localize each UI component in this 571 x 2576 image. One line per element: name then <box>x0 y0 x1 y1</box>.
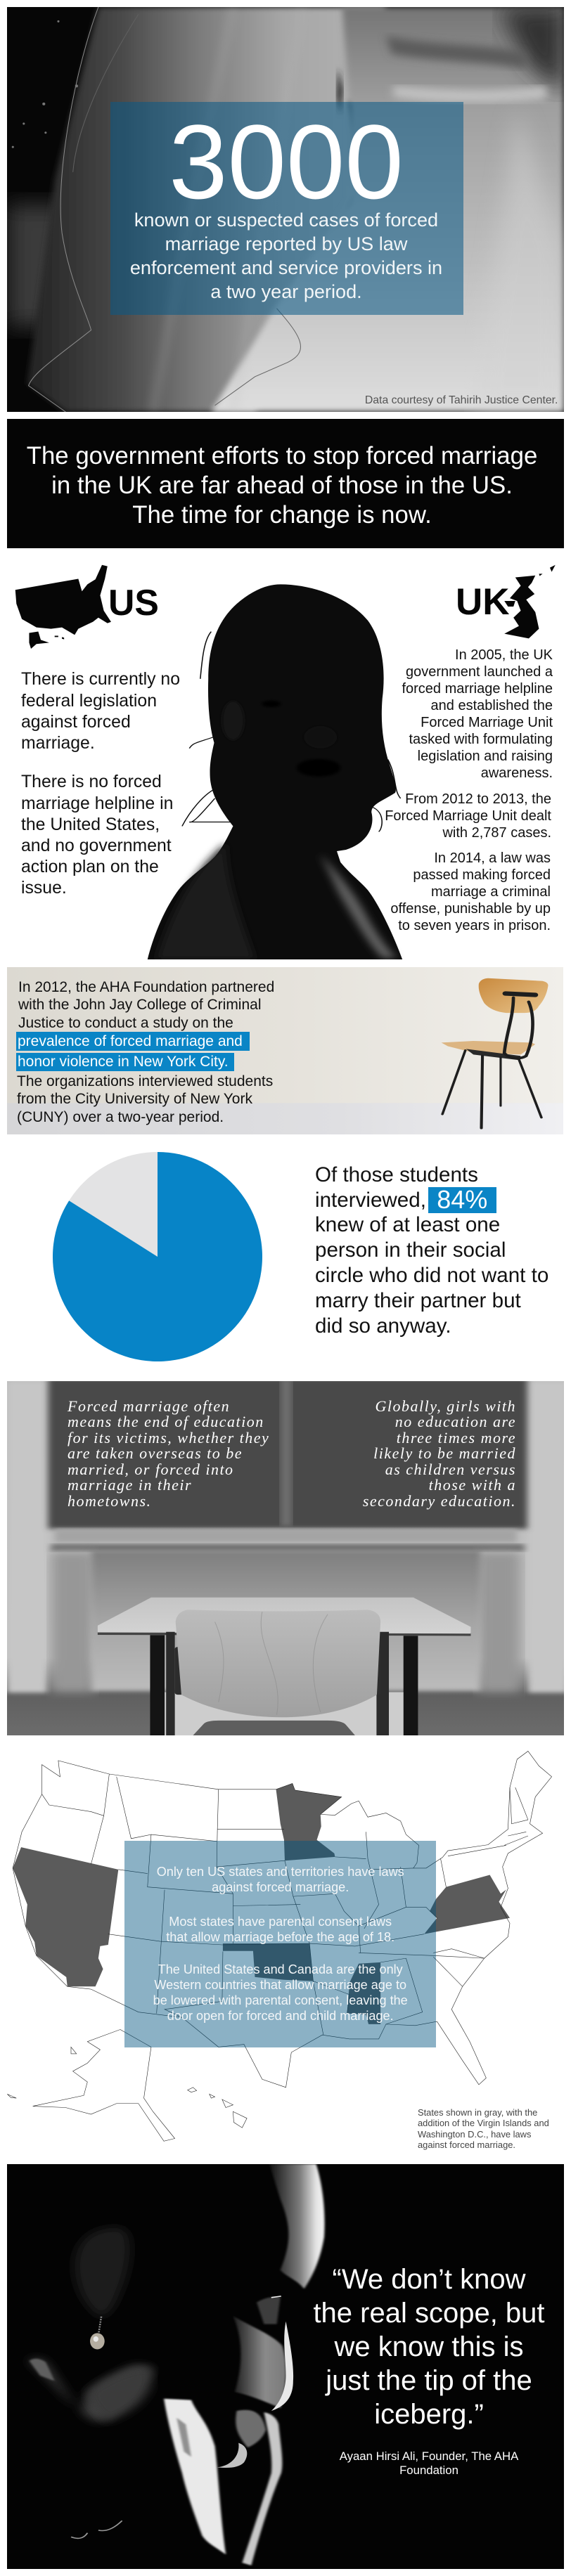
UK helpline note <box>402 647 553 781</box>
banner statement: The time for change is now. <box>132 501 432 529</box>
UK case count note: Forced Marriage Unit dealt <box>385 808 551 824</box>
UK helpline note: awareness. <box>481 765 553 781</box>
text: survey result: interviewed, <box>315 1189 426 1212</box>
text: study introduction <box>18 979 274 1031</box>
photo: bride veil and dress <box>7 7 564 412</box>
map legend note: Washington D.C., have laws <box>418 2129 531 2140</box>
highlight: study topic line one: prevalence of forced marriage and <box>18 1033 243 1049</box>
quote text: “We don’t know <box>333 2264 525 2295</box>
text: education impact: hometowns. <box>68 1492 152 1510</box>
text: study method <box>17 1073 273 1125</box>
text: study method: from the City University of New York <box>17 1091 252 1107</box>
text: survey result: did so anyway. <box>315 1314 451 1338</box>
text: global education statistic: no education are <box>395 1413 516 1430</box>
highlight: 84%: 84% <box>437 1185 487 1214</box>
text: education impact: marriage in their <box>68 1476 192 1494</box>
text: education impact: are taken overseas to be <box>68 1444 243 1462</box>
UK law note: marriage a criminal <box>431 884 551 900</box>
banner statement: The government efforts to stop forced marriage <box>27 442 537 470</box>
US legislation note: federal legislation <box>21 692 157 710</box>
quote attribution <box>339 2449 519 2477</box>
quote text: the real scope, but <box>313 2298 545 2329</box>
statistic description: a two year period. <box>210 280 362 302</box>
text: education impact <box>68 1397 269 1510</box>
text: education impact: for its victims, whether they <box>68 1429 269 1446</box>
statistic description: known or suspected cases of forced <box>134 209 438 231</box>
text: states with laws <box>157 1865 404 1894</box>
UK law note: passed making forced <box>413 867 551 883</box>
quote text: iceberg.” <box>374 2399 484 2430</box>
text: US facts <box>21 670 180 898</box>
text: study introduction: Justice to conduct a study on the <box>18 1015 233 1031</box>
text: survey result: person in their social <box>315 1238 506 1262</box>
US legislation note: There is currently no <box>21 670 180 689</box>
text: education impact: means the end of education <box>68 1413 264 1430</box>
US legislation note: against forced <box>21 713 131 732</box>
statistic description: marriage reported by US law <box>165 233 407 254</box>
text: study method: The organizations interviewed students <box>17 1073 273 1089</box>
text: survey result: circle who did not want to <box>315 1264 548 1287</box>
text: parental consent <box>166 1915 394 1944</box>
photo: silhouette of young woman <box>148 584 402 959</box>
UK helpline note: legislation and raising <box>418 749 553 764</box>
panel: US versus UK comparison <box>7 555 564 959</box>
panel: classroom photo <box>7 1381 564 1735</box>
panel: 84 percent statistic <box>53 1152 548 1361</box>
map: US states with forced marriage laws <box>7 1751 552 2142</box>
US helpline note: the United States, <box>21 815 160 834</box>
blue overlay box with statistic <box>110 102 463 315</box>
big number: 3000: 3000 <box>169 103 404 221</box>
UK law note <box>390 850 551 933</box>
text: states with laws: against forced marriage. <box>212 1880 349 1894</box>
UK helpline note: government launched a <box>406 664 553 680</box>
quote text: just the tip of the <box>326 2365 532 2396</box>
quote attribution: Ayaan Hirsi Ali, Founder, The AHA <box>340 2449 518 2463</box>
text: western countries <box>153 1962 408 2023</box>
UK case count note: with 2,787 cases. <box>442 825 551 841</box>
text: study introduction: In 2012, the AHA Foundation partnered <box>18 979 274 995</box>
map legend note: addition of the Virgin Islands and <box>418 2118 549 2128</box>
US legislation note <box>21 670 180 753</box>
text: states with laws: Only ten US states and territories have laws <box>157 1865 404 1879</box>
UK law note: to seven years in prison. <box>398 918 551 933</box>
photo: woman in profile <box>27 2164 326 2567</box>
text: survey result: marry their partner but <box>315 1289 521 1312</box>
text: global education statistic: Globally, girls with <box>375 1397 516 1415</box>
panel: hero bridal photo <box>7 7 564 412</box>
US helpline note: marriage helpline in <box>21 794 173 813</box>
blue overlay box with map facts <box>124 1840 436 2047</box>
UK helpline note: forced marriage helpline <box>402 681 553 697</box>
text: study introduction: with the John Jay College of Criminal <box>18 997 262 1013</box>
text: global education statistic: those with a <box>429 1476 516 1494</box>
text: parental consent: that allow marriage before the age of 18. <box>166 1930 394 1944</box>
photo: empty school chair <box>7 967 563 1134</box>
pie chart: 84 percent <box>53 1152 262 1361</box>
map legend note: against forced marriage. <box>418 2140 515 2150</box>
icon: UK map silhouette <box>504 565 556 638</box>
text: global education statistic: three times more <box>397 1429 516 1446</box>
panel: black banner <box>7 419 564 548</box>
text: western countries: The United States and Canada are the only <box>158 1962 403 1976</box>
US helpline note: There is no forced <box>21 772 162 791</box>
US legislation note: marriage. <box>21 734 95 753</box>
heading: UK: UK <box>456 581 510 623</box>
quote text: we know this is <box>335 2331 523 2362</box>
US helpline note <box>21 772 173 898</box>
quote text <box>313 2264 545 2430</box>
UK case count note: From 2012 to 2013, the <box>405 791 551 807</box>
UK helpline note: In 2005, the UK <box>455 647 553 663</box>
UK law note: offense, punishable by up <box>390 901 551 917</box>
statistic description: enforcement and service providers in <box>130 257 442 278</box>
banner statement: in the UK are far ahead of those in the US. <box>51 472 513 499</box>
text: UK facts <box>385 647 553 933</box>
highlight: study topic line two: honor violence in New York City. <box>18 1054 229 1070</box>
quote attribution: Foundation <box>399 2464 458 2477</box>
text: global education statistic <box>363 1397 516 1510</box>
text: global education statistic: secondary education. <box>363 1492 516 1510</box>
statistic description <box>130 209 442 302</box>
panel: US state law map <box>7 1751 552 2150</box>
data source credit: Data courtesy of Tahirih Justice Center. <box>365 394 558 406</box>
UK helpline note: tasked with formulating <box>409 732 553 747</box>
UK helpline note: and established the <box>431 698 553 713</box>
text: western countries: Western countries that allow marriage age to <box>154 1978 406 1992</box>
US helpline note: action plan on the <box>21 857 159 876</box>
UK helpline note: Forced Marriage Unit <box>421 715 553 730</box>
text: education impact: married, or forced into <box>68 1461 234 1478</box>
text: education impact: Forced marriage often <box>68 1397 230 1415</box>
text: western countries: door open for forced and child marriage. <box>167 2009 394 2023</box>
text: global education statistic: likely to be married <box>373 1444 516 1462</box>
text: western countries: be lowered with parental consent, leaving the <box>153 1993 408 2007</box>
UK law note: In 2014, a law was <box>434 850 551 866</box>
panel: closing quote <box>7 2164 564 2569</box>
highlight: 84% <box>428 1187 496 1213</box>
UK case count note <box>385 791 551 841</box>
text: survey result: Of those students <box>315 1163 478 1186</box>
US helpline note: issue. <box>21 879 67 898</box>
US helpline note: and no government <box>21 836 172 855</box>
text: parental consent: Most states have parental consent laws <box>169 1915 392 1929</box>
heading: US: US <box>108 582 159 623</box>
text: global education statistic: as children versus <box>385 1461 516 1478</box>
text: study method: (CUNY) over a two-year period. <box>17 1109 224 1125</box>
map legend note <box>418 2107 549 2150</box>
photo: classroom desk and chair <box>7 1381 564 1735</box>
icon: US map silhouette <box>15 565 111 649</box>
map legend note: States shown in gray, with the <box>418 2107 537 2118</box>
panel: AHA Foundation study <box>7 967 563 1134</box>
text: survey result <box>315 1163 548 1338</box>
banner statement <box>27 442 537 529</box>
text: survey result: knew of at least one <box>315 1213 500 1236</box>
